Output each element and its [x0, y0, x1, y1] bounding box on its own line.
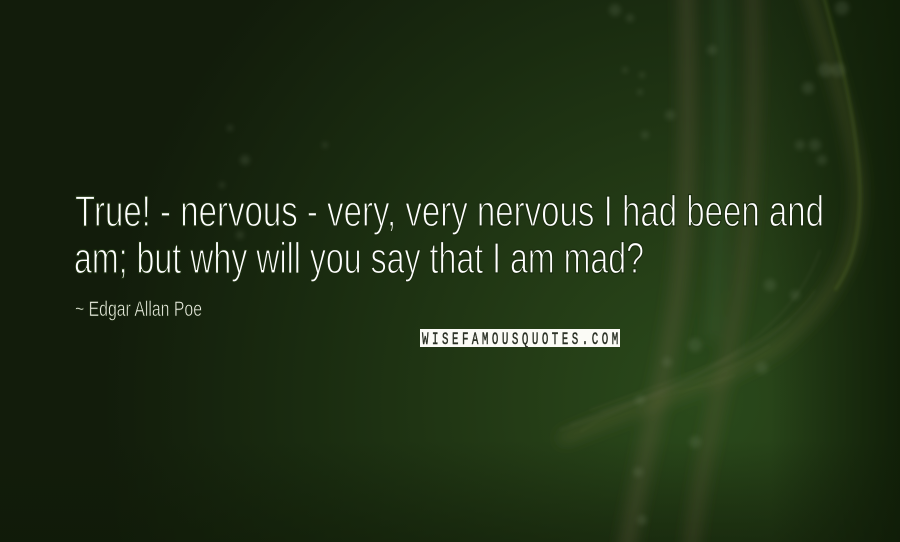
bokeh particles — [219, 1, 849, 525]
quote text — [74, 187, 824, 283]
light streaks — [560, 0, 860, 542]
author attribution: ~ Edgar Allan Poe — [75, 298, 202, 321]
watermark badge: WISEFAMOUSQUOTES.COM — [422, 331, 618, 350]
quote line 2: am; but why will you say that I am mad? — [74, 234, 644, 283]
